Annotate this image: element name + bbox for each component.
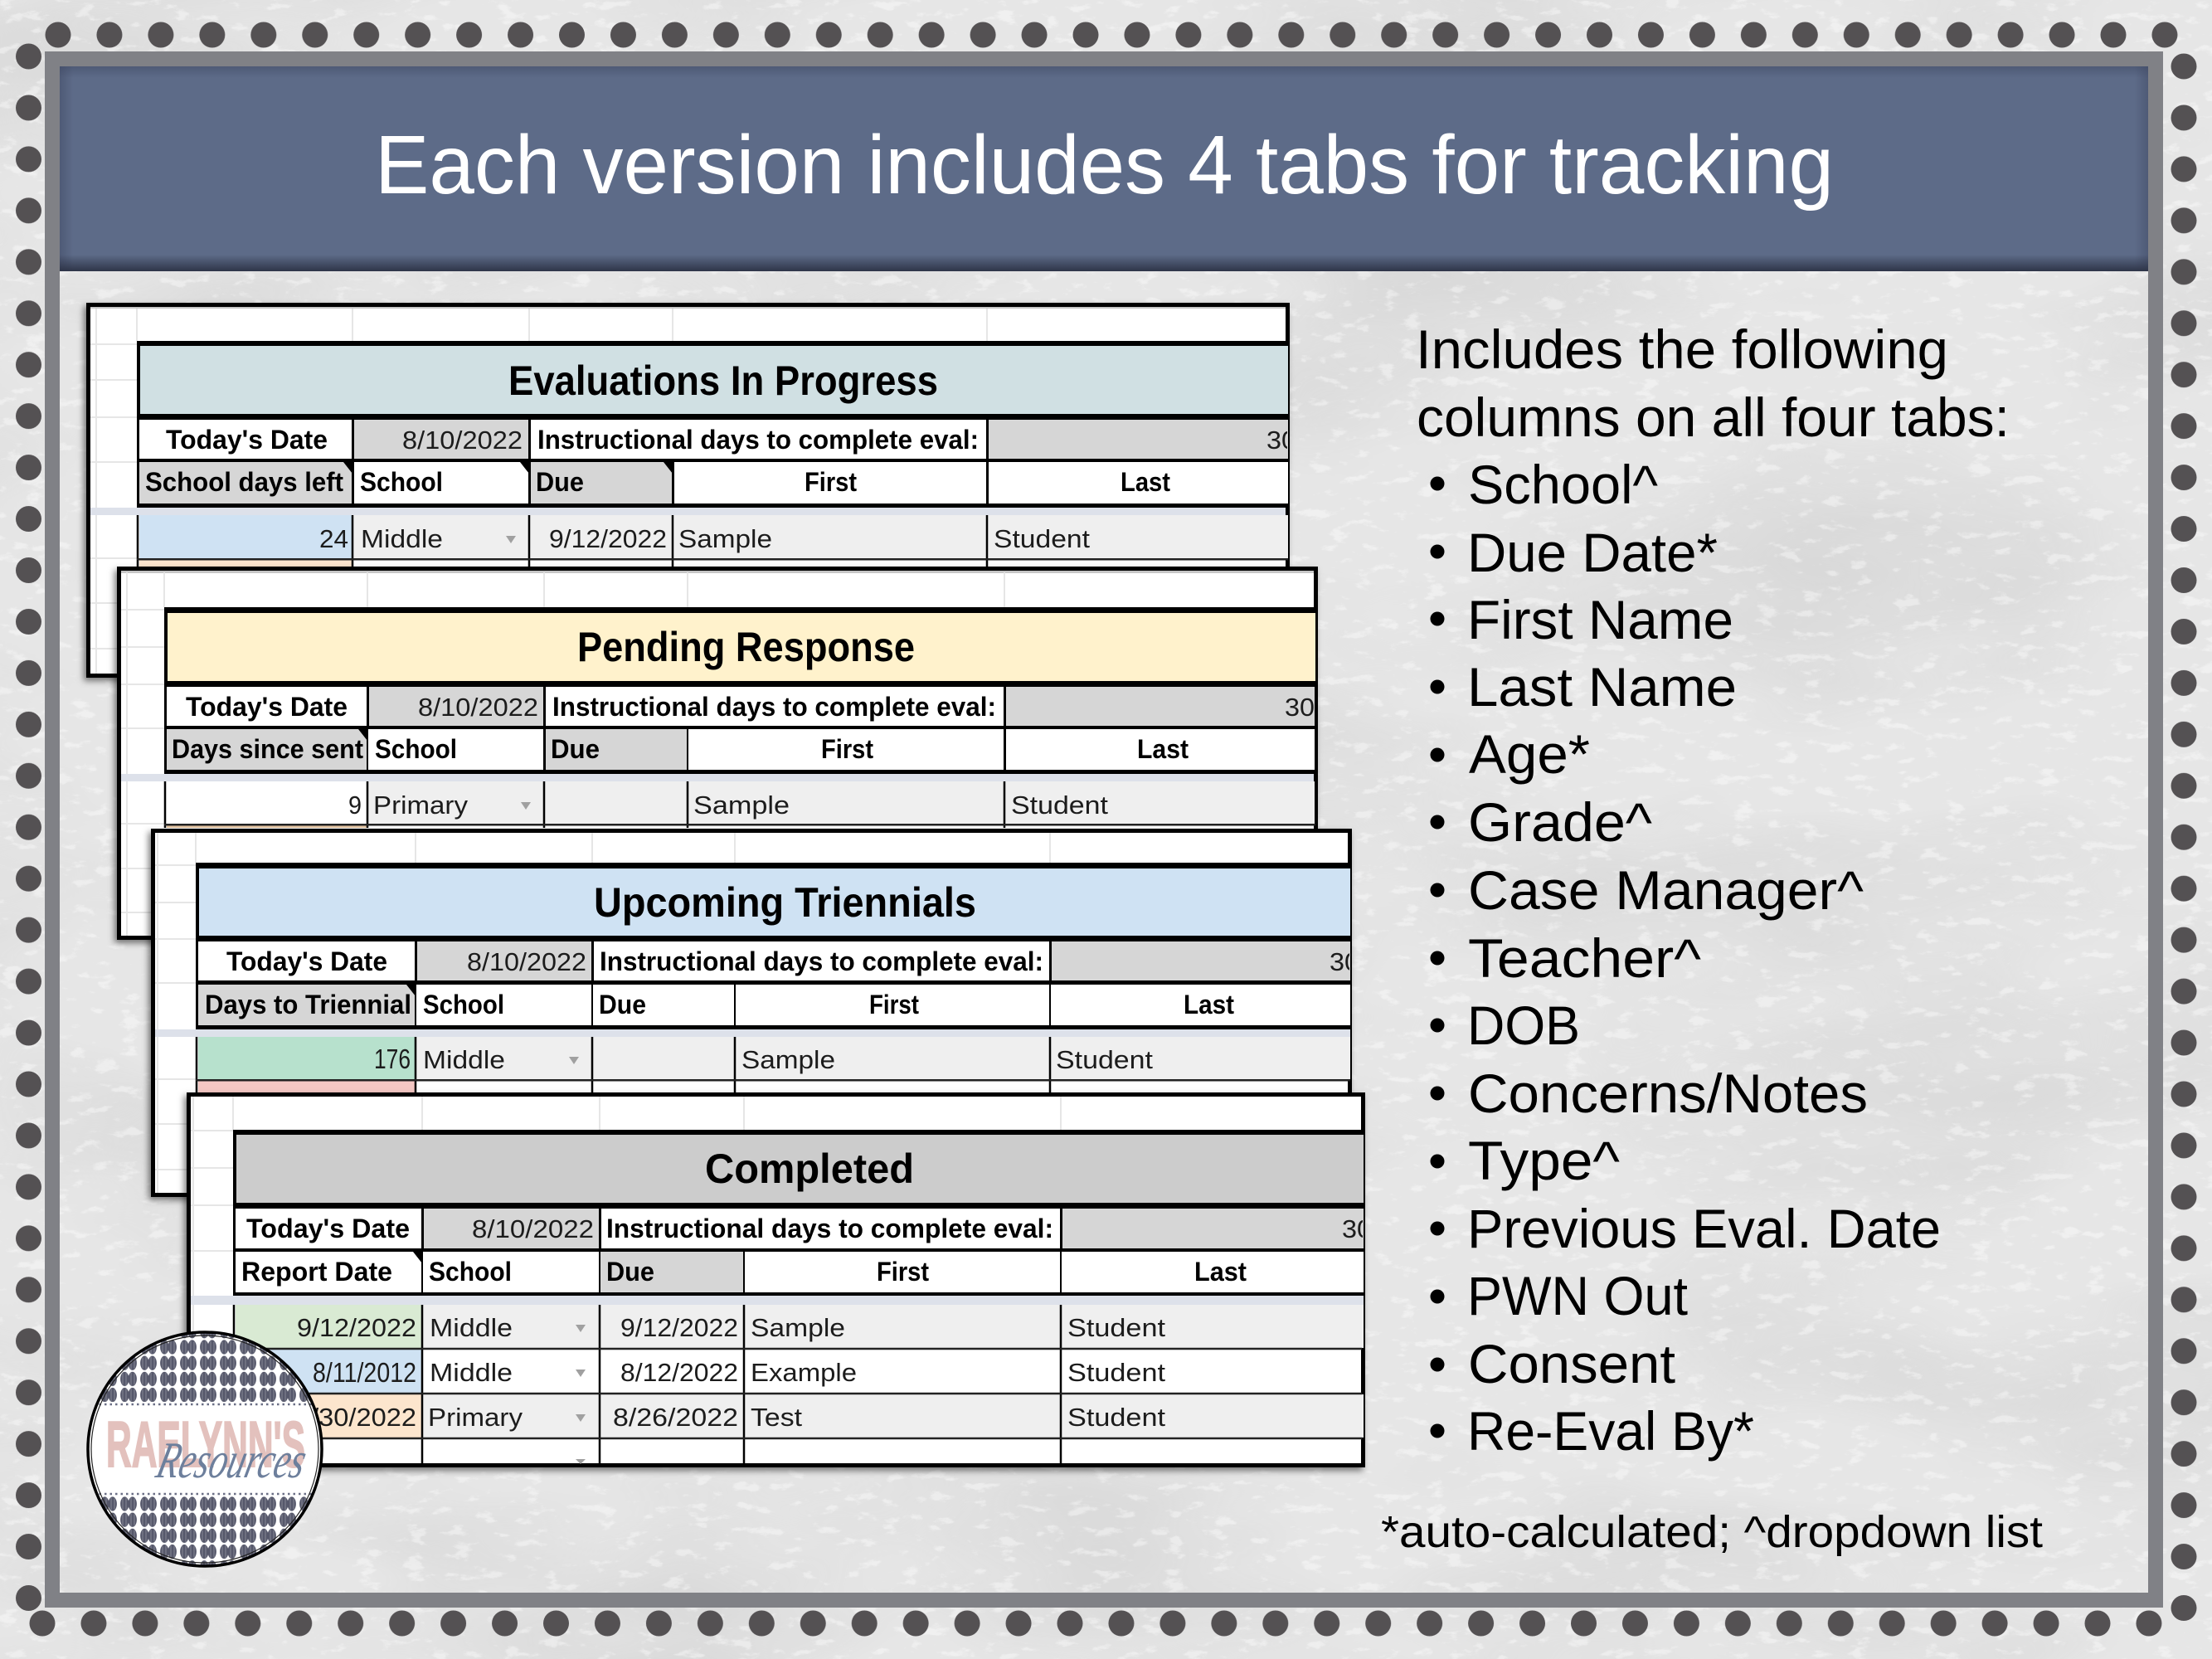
header band bbox=[60, 66, 2148, 271]
data rows: 8/12/2022 bbox=[620, 1358, 738, 1387]
sheet title band bbox=[196, 863, 1350, 1029]
panel: sheet Evaluations In Progress bbox=[88, 305, 1296, 675]
bulleted list of columns: Case Manager^ bbox=[1468, 859, 1864, 921]
panel: sheet Completed bbox=[189, 1095, 1372, 1465]
column heading row: Last bbox=[1184, 990, 1234, 1019]
bulleted list of columns: Type^ bbox=[1468, 1130, 1620, 1191]
date row bbox=[167, 687, 1315, 726]
data row: Sample bbox=[741, 1045, 835, 1074]
footnote: *auto-calculated; ^dropdown list bbox=[1381, 1507, 2043, 1557]
sheet title band: Completed bbox=[705, 1146, 914, 1192]
date row: 8/10/2022 bbox=[467, 947, 586, 976]
bulleted list of columns: Concerns/Notes bbox=[1468, 1063, 1868, 1124]
data row: 9 bbox=[348, 791, 362, 820]
column heading row: First bbox=[869, 990, 919, 1019]
bulleted list of columns: Age* bbox=[1469, 723, 1590, 785]
data rows: Student bbox=[1067, 1313, 1165, 1342]
sheet title band: Pending Response bbox=[577, 624, 915, 670]
data rows: 8/26/2022 bbox=[613, 1403, 738, 1432]
column heading row: Last bbox=[1137, 734, 1189, 764]
column heading row bbox=[198, 985, 1350, 1025]
date row: Today's Date bbox=[166, 425, 328, 455]
data row: Sample bbox=[693, 791, 790, 820]
data rows: Test bbox=[751, 1403, 802, 1432]
bulleted list of columns: PWN Out bbox=[1467, 1265, 1688, 1326]
data row: 176 bbox=[374, 1044, 411, 1074]
data rows: Primary bbox=[428, 1403, 523, 1432]
date row: 8/10/2022 bbox=[402, 426, 523, 455]
bulleted list of columns: Grade^ bbox=[1468, 791, 1652, 853]
data row bbox=[164, 781, 1315, 828]
column heading row: Days since sent bbox=[172, 734, 363, 764]
sheet title band: Upcoming Triennials bbox=[594, 879, 976, 926]
column heading row: First bbox=[877, 1257, 929, 1287]
sheet title band bbox=[233, 1130, 1364, 1296]
column heading row bbox=[139, 462, 1288, 504]
column heading row: Due bbox=[606, 1257, 654, 1287]
data rows: 8/11/2012 bbox=[313, 1357, 416, 1388]
column heading row: Due bbox=[599, 990, 646, 1019]
logo badge: Resources bbox=[151, 1432, 313, 1489]
column heading row: First bbox=[821, 734, 873, 764]
logo badge: RAELYNN'S bbox=[106, 1408, 305, 1481]
data row bbox=[196, 1037, 1350, 1092]
column heading row: School bbox=[375, 734, 457, 764]
bulleted list of columns: Due Date* bbox=[1467, 522, 1718, 583]
column heading row bbox=[236, 1252, 1364, 1292]
data row: Student bbox=[994, 524, 1090, 553]
date row bbox=[236, 1209, 1372, 1248]
sheet title band bbox=[137, 341, 1288, 508]
data rows: Middle bbox=[430, 1358, 513, 1387]
logo badge bbox=[83, 1331, 332, 1567]
data rows: 8/30/2022 bbox=[296, 1403, 416, 1432]
data rows bbox=[233, 1305, 1364, 1465]
bulleted list of columns: Previous Eval. Date bbox=[1467, 1198, 1941, 1259]
column heading row: Last bbox=[1121, 467, 1170, 497]
bulleted list of columns: Last Name bbox=[1467, 656, 1737, 718]
data rows: Middle bbox=[430, 1313, 513, 1342]
text block: intro: columns on all four tabs: bbox=[1417, 387, 2010, 448]
sheet title band: Evaluations In Progress bbox=[508, 358, 938, 404]
sheet title band bbox=[164, 607, 1315, 774]
panel: sheet Upcoming Triennials bbox=[153, 831, 1359, 1194]
date row: 30 bbox=[1285, 693, 1315, 722]
data rows: 9/12/2022 bbox=[297, 1313, 416, 1342]
column heading row: School bbox=[360, 467, 443, 497]
data row bbox=[137, 515, 1288, 567]
column heading row: Due bbox=[551, 734, 600, 764]
date row: Instructional days to complete eval: bbox=[537, 425, 979, 455]
date row: Instructional days to complete eval: bbox=[606, 1214, 1053, 1243]
date row bbox=[139, 420, 1296, 459]
data rows: 9/12/2022 bbox=[620, 1313, 738, 1342]
data rows: Sample bbox=[751, 1313, 845, 1342]
bulleted list of columns: First Name bbox=[1467, 589, 1733, 650]
data row: 24 bbox=[319, 524, 348, 553]
data row: Sample bbox=[678, 524, 772, 553]
data row: 9/12/2022 bbox=[549, 524, 667, 553]
column heading row: School bbox=[429, 1257, 512, 1287]
column heading row: Last bbox=[1194, 1257, 1247, 1287]
date row: 30 bbox=[1342, 1214, 1372, 1243]
bulleted list of columns: Teacher^ bbox=[1468, 927, 1701, 989]
date row: 8/10/2022 bbox=[418, 693, 538, 722]
date row: 30 bbox=[1266, 426, 1296, 455]
date row bbox=[198, 941, 1359, 980]
column heading row: Due bbox=[536, 467, 584, 497]
bulleted list of columns: School^ bbox=[1468, 454, 1658, 515]
date row: Today's Date bbox=[186, 692, 348, 722]
data row: Middle bbox=[361, 524, 443, 553]
column heading row bbox=[167, 729, 1315, 770]
column heading row: First bbox=[805, 467, 857, 497]
data row: Student bbox=[1011, 791, 1108, 820]
data rows: Example bbox=[751, 1358, 857, 1387]
bulleted list of columns: Consent bbox=[1468, 1333, 1675, 1394]
title: Each version includes 4 tabs for tracking bbox=[375, 119, 1834, 212]
column heading row: Report Date bbox=[241, 1257, 392, 1287]
data row: Middle bbox=[423, 1045, 505, 1074]
date row: Today's Date bbox=[246, 1214, 410, 1243]
date row: Instructional days to complete eval: bbox=[552, 692, 996, 722]
date row: Today's Date bbox=[226, 946, 387, 976]
panel: sheet Pending Response bbox=[119, 569, 1315, 937]
data row: Student bbox=[1056, 1045, 1153, 1074]
data row: Primary bbox=[373, 791, 469, 820]
bulleted list of columns: DOB bbox=[1467, 995, 1580, 1056]
date row: Instructional days to complete eval: bbox=[600, 946, 1043, 976]
date row: 8/10/2022 bbox=[472, 1214, 594, 1243]
text block: intro bbox=[1416, 319, 2010, 448]
column heading row: School bbox=[423, 990, 504, 1019]
bulleted list of columns: Re-Eval By* bbox=[1467, 1400, 1754, 1462]
data rows: Student bbox=[1067, 1403, 1165, 1432]
column heading row: Days to Triennial bbox=[205, 990, 411, 1019]
data rows: Student bbox=[1067, 1358, 1165, 1387]
date row: 30 bbox=[1330, 947, 1359, 976]
text block: intro: Includes the following bbox=[1416, 319, 1948, 380]
bulleted list of columns bbox=[1430, 454, 1941, 1462]
column heading row: School days left bbox=[145, 467, 343, 497]
